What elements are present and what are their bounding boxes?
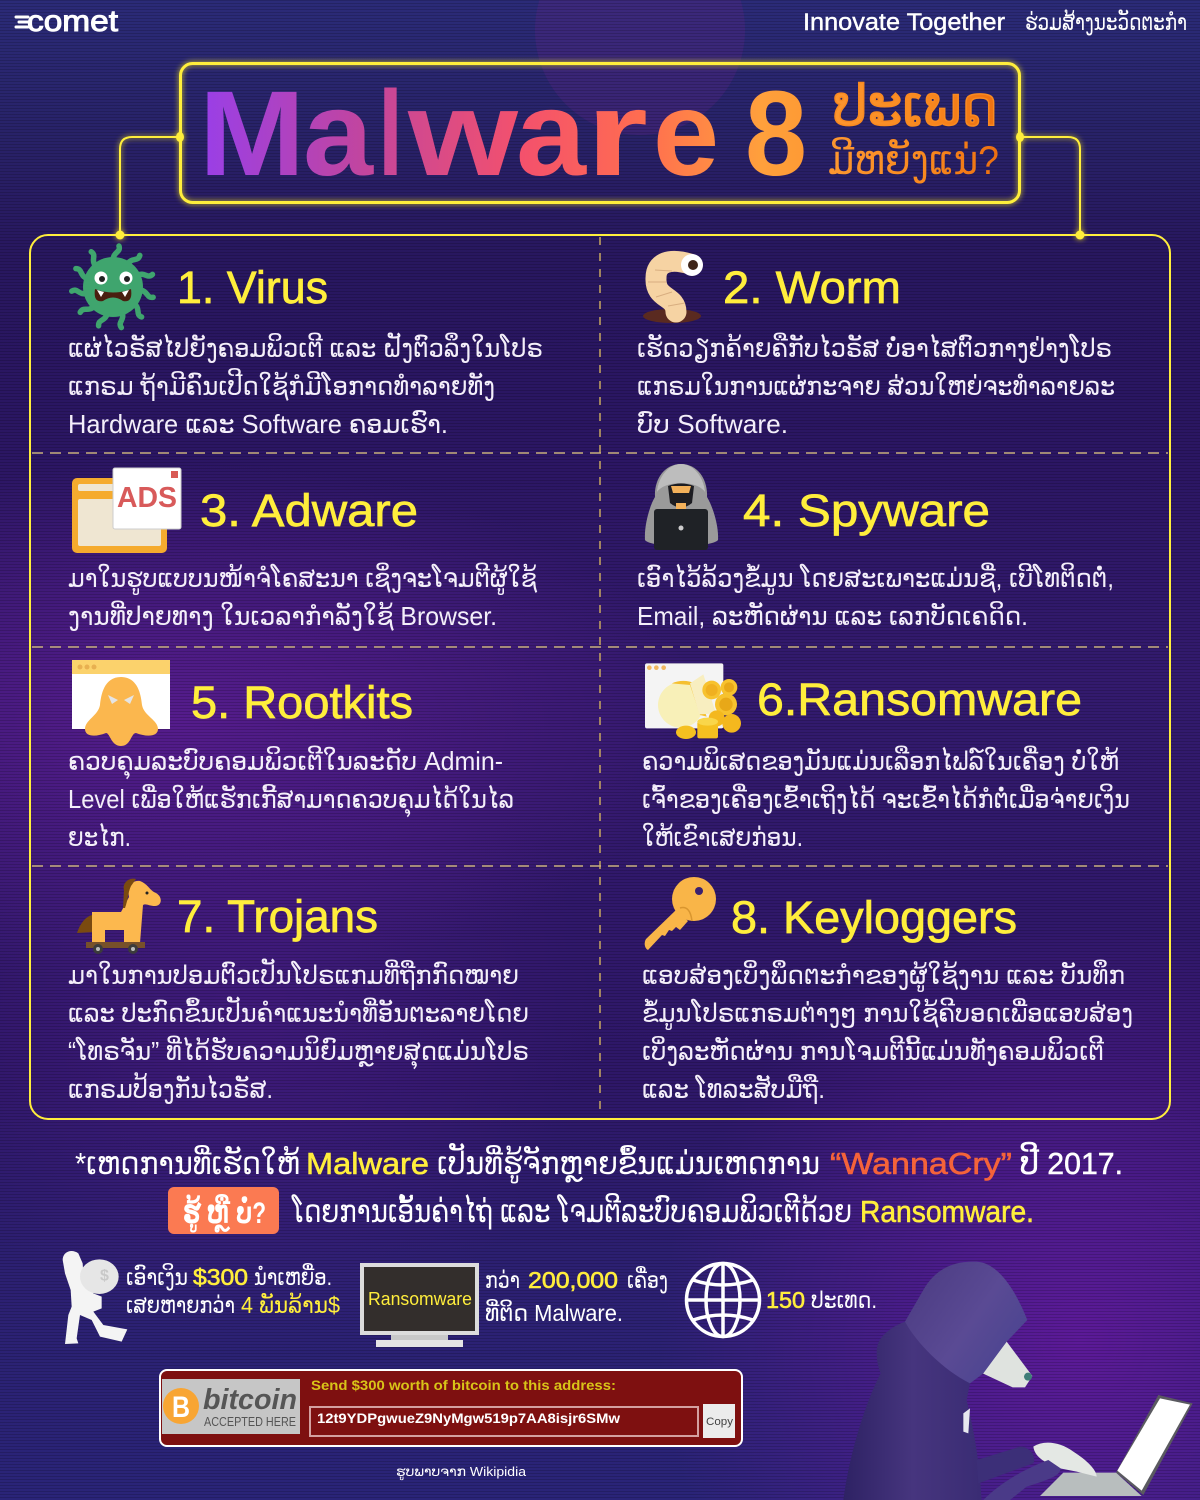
icon: worm [643,254,703,323]
stat: countries: ປະເທດ. [811,1287,877,1313]
icon: key [645,877,716,950]
bitcoin logo: ACCEPTED HERE [204,1414,296,1429]
section 8: keyloggers [642,877,1133,1104]
section 1: virus [68,246,543,439]
text block: ມາໃນຮູບແບບນໜ້າຈໍໂຄສະນາ ເຊິ່ງຈະໂຈມຕີຜູ້ໃຊ້ [68,562,537,596]
stat: countries [766,1287,877,1313]
section 3: adware [68,468,537,632]
heading: 4. Spyware [743,485,990,536]
text block [68,562,537,632]
title: w [407,65,519,201]
heading: 7. Trojans [177,891,378,942]
icon: monitor: Ransomware [368,1289,472,1309]
copy button: Copy [706,1416,734,1428]
title: 8 [745,65,807,201]
text block: ແຜ່ໄວຣັສໄປຍັງຄອມພິວເຕີ ແລະ ຝັງຕົວລຶງໃນໂປຣ [68,331,543,363]
section 4: spyware [637,464,1114,631]
text block: ແກຣມປ້ອງກັນໄວຣັສ. [68,1070,273,1104]
bitcoin logo: bitcoin [203,1384,297,1416]
stat: ransom amount: ເອົາເງິນ [126,1262,188,1290]
icon: virus [72,246,154,328]
image credit: ຮູບພາບຈາກ Wikipidia [396,1464,527,1480]
text block: ໃຫ້ເຂົາເສຍກ່ອນ. [642,821,803,852]
heading: 8. Keyloggers [731,892,1017,943]
text block [637,562,1114,631]
icon: money bag window [645,663,741,739]
title: l [378,65,403,201]
section 7: trojans [68,879,529,1104]
stat: countries: 150 [766,1287,805,1313]
bitcoin logo: B [172,1391,190,1424]
stat: infected machines: ກວ່າ [485,1267,520,1293]
bitcoin logo [162,1379,300,1434]
fact line 1: Malware [306,1146,429,1181]
section 2: worm [637,254,1115,439]
text block: ຄວາມພິເສດຂອງມັນແມ່ນເລືອກໄຟລ໌ໃນເຄື່ອງ ບໍ່ໃຫ້ [642,745,1119,776]
text block: ເຮັດວຽກຄ້າຍຄືກັບໄວຣັສ ບໍ່ອາໄສຕົວກາງຢ່າງໂປຣ [637,332,1112,363]
stat: ransom amount: 4 ພັນລ້ານ$ [241,1292,340,1318]
text block [642,959,1133,1104]
heading: 5. Rootkits [191,677,413,728]
section 5: rootkits [68,660,514,852]
title: ມີຫຍັງແນ່? [828,136,999,184]
text block: ມາໃນການປອມຕົວເປັນໂປຣແກມທີ່ຖືກກົດໝາຍ [68,957,519,990]
text block: ຂໍ້ມູນໂປຣແກຣມຕ່າງໆ ການໃຊ້ຄີບອດເພື່ອແອບສ່ອງ [642,997,1133,1031]
text block: Level ເພື່ອໃຫ້ແຮັກເກີ້ສາມາດຄວບຄຸມໄດ້ໃນໄລ [68,783,514,818]
icon: globe [686,1263,760,1337]
title: a [303,65,375,201]
icon: thief with sack: $ [100,1268,109,1285]
badge: did you know [168,1187,279,1234]
text block [68,746,514,852]
text block: ບົບ Software. [637,409,788,439]
text block: ເຈົ້າຂອງເຄື່ອງເຂົ້າເຖິງໄດ້ ຈະເຂົ້າໄດ້ກໍຕໍ່ເມື່ອຈ່າຍເງິນ [642,783,1130,814]
bitcoin address: 12t9YDPgwueZ9NyMgw519p7AA8isjr6SMw [317,1410,620,1426]
stat: infected machines: ທີ່ຕິດ Malware. [485,1298,623,1326]
text block: ຄວບຄຸມລະບົບຄອມພິວເຕີໃນລະດັບ Admin- [68,746,503,780]
stat: infected machines [485,1265,668,1326]
heading: 2. Worm [723,262,901,313]
main panel [30,235,1170,1119]
text block: ເອົາໄວ້ລ້ວງຂໍ້ມູນ ໂດຍສະເພາະແມ່ນຊື່, ເບີໂທຕິດຕໍ່, [637,562,1114,596]
icon: ads window [72,468,181,553]
illustration: hooded mole with laptop [843,1262,1193,1500]
text block: ເບິ່ງລະຫັດຜ່ານ ການໂຈມຕີນີ້ແມ່ນທັງຄອມພິວເຕີ [642,1035,1104,1066]
text block: Email, ລະຫັດຜ່ານ ແລະ ເລກບັດເຄດິດ. [637,601,1028,631]
bitcoin ransom panel [160,1370,742,1446]
fact line 1: ເປັນທີ່ຮູ້ຈັກຫຼາຍຂຶ້ນແມ່ນເຫດການ [437,1144,820,1183]
text block: Hardware ແລະ Software ຄອມເຮົາ. [68,409,448,439]
stat: infected machines: 200,000 [528,1267,618,1293]
heading: 3. Adware [200,485,418,536]
stat: ransom amount: ນຳເຫຍື່ອ. [254,1262,332,1290]
icon: trojan horse [77,879,161,954]
icon: ads window: ADS [117,482,177,514]
title: ປະເພດ [833,74,998,137]
title: M [199,65,305,201]
tagline [803,9,1187,36]
icon: hooded hacker [645,464,718,550]
bitcoin address [310,1407,698,1436]
title: a [516,65,588,201]
fact line 1 [75,1141,1123,1183]
fact line 1: ປີ 2017. [1020,1141,1123,1181]
title: e [653,65,719,201]
text block [68,957,529,1104]
logo: comet: comet [27,5,119,38]
text block: ແລະ ປະກົດຂຶ້ນເປັນຄຳແນະນຳທີ່ອັນຕະລາຍໂດຍ [68,995,529,1028]
icon: ghost window [72,660,170,746]
icon: thief with sack [63,1251,127,1344]
stat: ransom amount [126,1262,340,1318]
fact line 1: *ເຫດການທີ່ເຮັດໃຫ້ [75,1145,300,1181]
instruction: Send $300 worth of bitcoin to this address: [311,1377,616,1393]
fact line 2: Ransomware. [860,1194,1034,1229]
text block [68,331,543,439]
text block [642,745,1130,852]
tagline: Innovate Together [803,9,1005,36]
heading: 6.Ransomware [757,674,1082,725]
title box with connectors [116,64,1084,240]
stat: ransom amount: ເສຍຫາຍກວ່າ [126,1292,235,1318]
text block: ງານທີ່ປາຍທາງ ໃນເວລາກຳລັງໃຊ້ Browser. [68,600,497,632]
heading: 1. Virus [177,262,328,313]
section 6: ransomware [642,663,1130,852]
title [199,65,999,201]
title: r [586,65,648,201]
text block: ແກຣມໃນການແຜ່ກະຈາຍ ສ່ວນໃຫຍ່ຈະທຳລາຍລະ [637,371,1115,401]
fact line 1: “WannaCry” [830,1146,1012,1181]
text block: “ໂທຣຈັນ” ທີ່ໄດ້ຮັບຄວາມນິຍົມຫຼາຍສຸດແມ່ນໂປຣ [68,1035,529,1070]
text block [637,332,1115,439]
stat: infected machines: ເຄື່ອງ [627,1265,668,1293]
icon: monitor [360,1263,479,1347]
text block: ແອບສ່ອງເບິ່ງພຶດຕະກຳຂອງຜູ້ໃຊ້ງານ ແລະ ບັນທຶກ [642,959,1125,993]
text block: ແລະ ໂທລະສັບມືຖື. [642,1074,825,1104]
text block: ແກຣມ ຖ້າມີຄົນເປີດໃຊ້ກໍມີໂອກາດທຳລາຍທັງ [68,368,495,402]
text block: ຍະໄກ. [68,822,131,852]
copy button [703,1404,735,1438]
fact line 2: ໂດຍການເອັ້ນຄ່າໄຖ່ ແລະ ໂຈມຕີລະບົບຄອມພິວເຕີດ້ວຍ [291,1193,852,1229]
badge: did you know: ຮູ້ ຫຼື ບໍ່? [183,1194,266,1233]
stat: ransom amount: $300 [193,1264,248,1290]
